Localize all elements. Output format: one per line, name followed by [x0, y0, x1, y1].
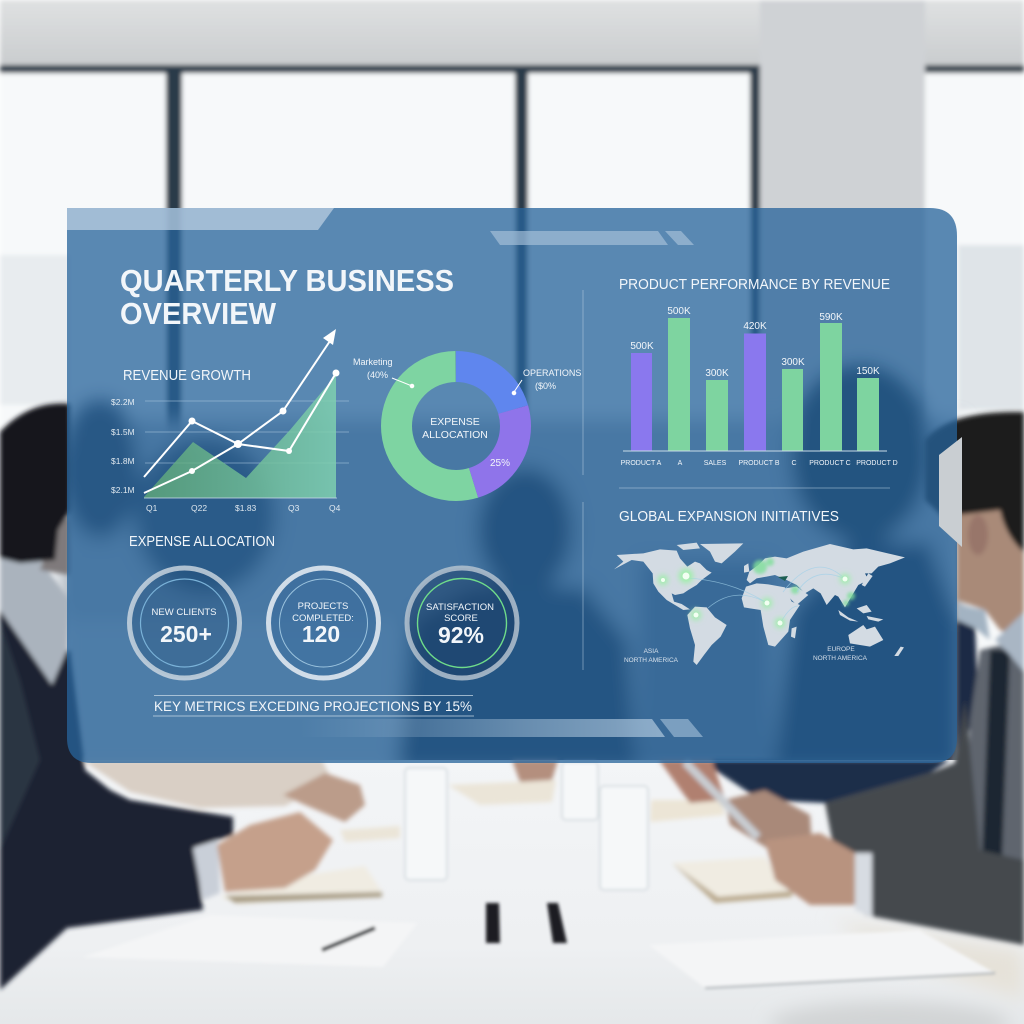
world map: NORTH AMERICA — [624, 657, 679, 664]
donut chart: expense allocation: ($0% — [535, 381, 556, 391]
donut chart: expense allocation: Marketing — [353, 357, 393, 367]
metric: projects completed — [268, 568, 378, 678]
heading: revenue growth: REVENUE GROWTH — [123, 367, 251, 384]
callout: key metrics: KEY METRICS EXCEDING PROJECTIONS BY 15% — [154, 698, 472, 714]
metric: satisfaction score: SCORE — [444, 613, 478, 624]
line chart: revenue growth: $1.5M — [111, 427, 135, 437]
bar chart: product revenue: PRODUCT C — [809, 460, 851, 467]
bar chart: product revenue: 150K — [856, 366, 880, 377]
bar chart: product revenue: PRODUCT B — [738, 460, 780, 467]
bar chart: product revenue: 420K — [743, 321, 767, 332]
line chart: revenue growth: $2.1M — [111, 485, 135, 495]
line chart: revenue growth — [111, 329, 349, 513]
metric: satisfaction score: 92% — [438, 622, 484, 648]
title: QUARTERLY BUSINESS — [120, 263, 454, 298]
bar chart: product revenue: A — [678, 460, 683, 467]
heading: global expansion: GLOBAL EXPANSION INITIATIVES — [619, 509, 839, 525]
table and foreground — [0, 404, 1024, 1024]
bar chart: product revenue: PRODUCT A — [621, 460, 662, 467]
bar chart: product revenue: 300K — [781, 357, 805, 368]
bar chart: product revenue: 300K — [705, 368, 729, 379]
world map: EUROPE — [827, 646, 855, 653]
metric: new clients: 250+ — [160, 621, 212, 647]
heading: expense allocation: EXPENSE ALLOCATION — [129, 534, 275, 550]
line chart: revenue growth: $2.2M — [111, 397, 135, 407]
line chart: revenue growth: $1.83 — [235, 503, 257, 513]
donut chart: expense allocation: (40% — [367, 370, 388, 380]
metric: projects completed: 120 — [302, 621, 340, 647]
bar chart: product revenue: 500K — [667, 306, 691, 317]
title — [120, 263, 454, 331]
donut chart: expense allocation — [353, 357, 581, 486]
world map — [614, 543, 905, 665]
line chart: revenue growth: Q1 — [146, 503, 158, 513]
donut chart: expense allocation: 25% — [490, 458, 510, 469]
world map: ASIA — [644, 648, 659, 655]
bar chart: product revenue: 590K — [819, 312, 843, 323]
bar chart: product revenue — [621, 306, 898, 467]
line chart: revenue growth: Q22 — [191, 503, 207, 513]
panel decoration: right notch — [939, 437, 962, 547]
panel decoration: bottom chevrons — [300, 719, 703, 737]
metric: projects completed: PROJECTS — [298, 601, 348, 612]
panel decoration: top left tab — [67, 208, 334, 230]
panel decoration: top chevrons — [490, 231, 694, 245]
glass panel — [67, 208, 962, 763]
metric: projects completed: COMPLETED: — [292, 613, 354, 624]
title: OVERVIEW — [120, 296, 277, 331]
donut chart: expense allocation: EXPENSE — [430, 416, 480, 428]
metric: new clients — [130, 568, 240, 678]
bar chart: product revenue: PRODUCT D — [856, 460, 898, 467]
line chart: revenue growth: Q4 — [329, 503, 341, 513]
world map: NORTH AMERICA — [813, 655, 868, 662]
metric: satisfaction score — [407, 568, 517, 678]
dividers — [583, 290, 890, 670]
bar chart: product revenue: SALES — [704, 460, 727, 467]
donut chart: expense allocation: OPERATIONS — [523, 368, 581, 378]
bar chart: product revenue: 500K — [630, 341, 654, 352]
line chart: revenue growth: Q3 — [288, 503, 300, 513]
heading: product performance: PRODUCT PERFORMANCE BY REVENUE — [619, 277, 890, 293]
metric: new clients: NEW CLIENTS — [152, 607, 216, 618]
metric: satisfaction score: SATISFACTION — [426, 602, 494, 613]
line chart: revenue growth: $1.8M — [111, 456, 135, 466]
donut chart: expense allocation: ALLOCATION — [422, 429, 488, 441]
bar chart: product revenue: C — [791, 460, 797, 467]
